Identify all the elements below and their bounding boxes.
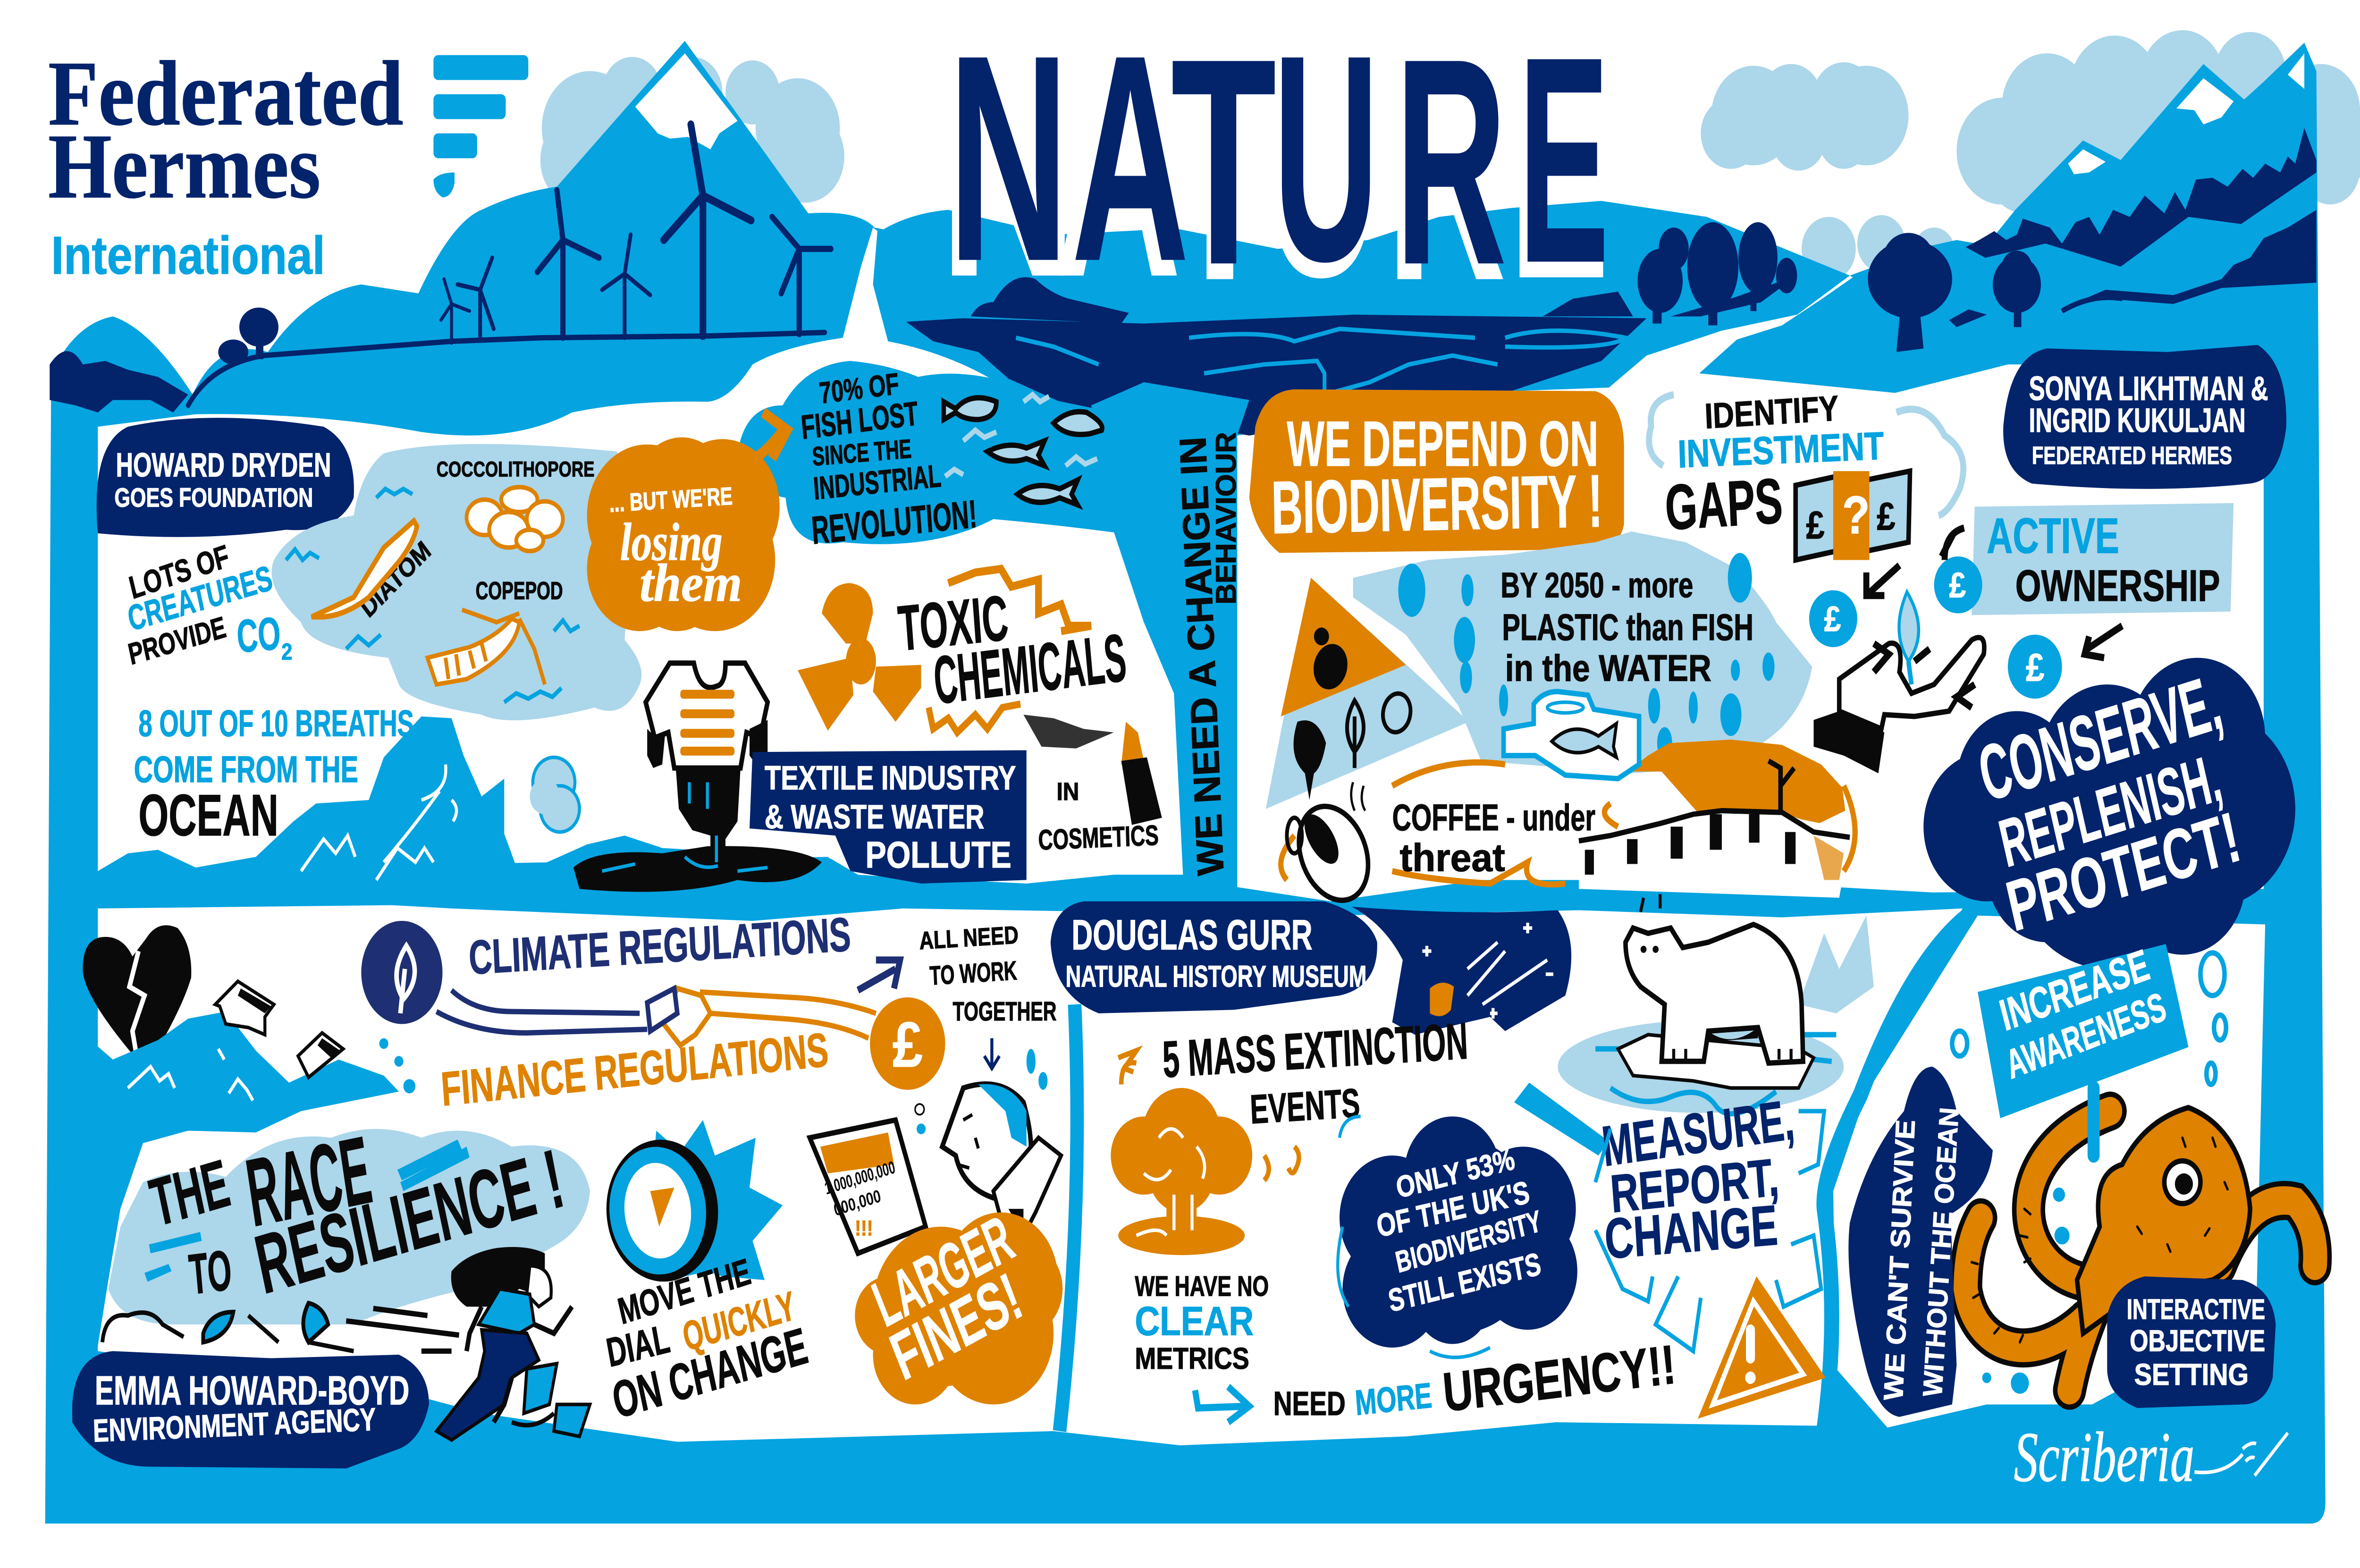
- sign: increase awareness: INCREASE: [1995, 940, 2154, 1040]
- speaker: interactive objective setting: SETTING: [2134, 1357, 2249, 1391]
- text: fish statistic: 70% OF: [818, 366, 900, 410]
- icon: bill and worried man: [810, 1049, 1061, 1253]
- text: measure report change: MEASURE,: [1599, 1087, 1797, 1178]
- text: 8 out of 10 breaths: 8 OUT OF 10 BREATHS: [138, 702, 414, 744]
- icon: fish: [944, 398, 1102, 505]
- background clouds: [540, 30, 2360, 281]
- plankton cloud: [271, 444, 641, 720]
- speaker: Sonya Likhtman and Ingrid Kukuljan: [2003, 345, 2286, 489]
- text: we need a change in behaviour: BEHAVIOUR: [1210, 432, 1242, 605]
- text: move the dial: ON CHANGE: [607, 1317, 812, 1430]
- tree on left hill: [218, 308, 278, 364]
- title NATURE: N: [939, 11, 1078, 338]
- title NATURE: N: [948, 0, 1069, 322]
- text: mass extinction: 5 MASS EXTINCTION: [1162, 1012, 1469, 1088]
- callout: race to resilience: RACE: [240, 1115, 378, 1247]
- text: lots of creatures: 2: [281, 639, 292, 665]
- callout: conserve replenish protect: PROTECT!: [2000, 797, 2247, 946]
- icon: pound coin orange: £: [893, 1009, 923, 1080]
- text: 8 out of 10 breaths: [134, 702, 414, 848]
- orange callout: but we're losing them: losing: [620, 513, 723, 572]
- title NATURE: U: [1273, 0, 1379, 322]
- callout: only 53 percent: OF THE UK'S: [1374, 1174, 1532, 1244]
- icon: ruler: [1514, 1083, 1609, 1155]
- title NATURE: T: [1163, 14, 1276, 342]
- text: clear metrics: METRICS: [1135, 1341, 1249, 1375]
- dark forest ridges: [50, 128, 2317, 413]
- trees on right hill: [1868, 233, 2122, 352]
- logo: International: [51, 226, 325, 286]
- text: toxic chemicals: TOXIC: [896, 582, 1011, 665]
- text: lots of creatures: LOTS OF: [126, 539, 233, 606]
- title NATURE: A: [1071, 0, 1189, 322]
- icon: octopus: [1952, 953, 2315, 1394]
- text: fish statistic: FISH LOST: [800, 395, 919, 447]
- icon: lipstick and smudge: COSMETICS: [1038, 819, 1159, 856]
- sign: increase awareness: AWARENESS: [2001, 984, 2171, 1088]
- callout: race to resilience: THE: [144, 1146, 236, 1241]
- text: toxic chemicals: [896, 569, 1129, 733]
- title NATURE: U: [1266, 11, 1379, 338]
- text: fish statistic: [800, 366, 978, 553]
- text: climate regulations: CLIMATE REGULATIONS: [468, 907, 852, 985]
- box: active ownership: [1972, 503, 2234, 615]
- text: move the dial: QUICKLY: [679, 1283, 799, 1360]
- text: move the dial: [603, 1250, 812, 1430]
- orange callout: but we're losing them: ... BUT WE'RE: [608, 482, 733, 518]
- speaker: Howard Dryden: HOWARD DRYDEN: [116, 447, 331, 484]
- icon: meteor space blob: [1352, 907, 1571, 1035]
- cloud: plastic than fish: PLASTIC than FISH: [1502, 607, 1753, 648]
- text: measure report change: REPORT,: [1609, 1147, 1781, 1224]
- icon: broken heart: [83, 925, 191, 1074]
- text: measure report change: CHANGE: [1603, 1193, 1779, 1271]
- icon: lipstick and smudge: [1023, 715, 1162, 856]
- callout: race to resilience: RESILIENCE !: [248, 1131, 571, 1312]
- white panel E: [1833, 916, 2265, 1427]
- icon: mushroom cloud: [1111, 1051, 1299, 1255]
- icon: dial: [597, 1120, 783, 1292]
- callout: race to resilience: [109, 1115, 590, 1324]
- box: textile industry: POLLUTE: [866, 834, 1011, 876]
- title NATURE: R: [1386, 14, 1507, 342]
- callout: only 53 percent: STILL EXISTS: [1386, 1246, 1543, 1319]
- speaker: Douglas Gurr: NATURAL HISTORY MUSEUM: [1066, 959, 1366, 993]
- text: need more urgency: NEED: [1273, 1385, 1346, 1423]
- orange callout: but we're losing them: [587, 438, 780, 631]
- speaker: Emma Howard-Boyd: EMMA HOWARD-BOYD: [95, 1368, 409, 1414]
- logo: [48, 42, 528, 286]
- text: lots of creatures: CO: [236, 607, 282, 663]
- text: finance regulations: FINANCE REGULATIONS: [439, 1023, 830, 1116]
- text: 8 out of 10 breaths: OCEAN: [138, 783, 278, 848]
- icon: hand with leaf and pounds: £: [1949, 565, 1966, 605]
- text: measure report change: [1595, 1087, 1824, 1351]
- icon: hand with leaf and pounds: £: [1824, 599, 1841, 639]
- text: all need to work together: [919, 921, 1057, 1069]
- callout: we can't survive without the ocean: WITHOUT THE OCEAN: [1917, 1106, 1965, 1398]
- icon: climate leaf coin: [361, 921, 443, 1024]
- callout: only 53 percent: ONLY 53%: [1393, 1142, 1517, 1205]
- title NATURE: E: [1518, 0, 1609, 324]
- icon: hand with leaf and pounds: [1809, 528, 2122, 773]
- infographic triangle: pyramid of life: [1266, 578, 1469, 809]
- text and icon: investment gaps: INVESTMENT: [1677, 424, 1885, 476]
- wave with ocean breath: [98, 717, 1054, 909]
- text: fish statistic: SINCE THE: [811, 434, 912, 472]
- cloud: plastic than fish: [1353, 531, 1812, 773]
- flood and houses: [90, 981, 415, 1346]
- box: textile industry: TEXTILE INDUSTRY: [765, 759, 1016, 797]
- text: clear metrics: CLEAR: [1135, 1298, 1254, 1344]
- sign: increase awareness: [1978, 940, 2188, 1118]
- blue strip: we need a change: [1091, 382, 1249, 887]
- text: fish statistic: REVOLUTION!: [810, 492, 978, 553]
- text: clear metrics: [1135, 1270, 1269, 1375]
- speaker: Emma Howard-Boyd: ENVIRONMENT AGENCY: [93, 1401, 376, 1449]
- lake: [906, 277, 1647, 436]
- text: toxic chemicals: CHEMICALS: [931, 620, 1129, 719]
- callout: conserve replenish protect: CONSERVE,: [1971, 658, 2229, 818]
- icon: copepod: [428, 610, 545, 684]
- text and icon: investment gaps: IDENTIFY: [1704, 388, 1839, 436]
- signature: Scriberia: Scriberia: [2014, 1418, 2194, 1497]
- white river, panel A: [98, 228, 1186, 884]
- coffee under threat: threat: [1400, 836, 1505, 880]
- callout: conserve replenish protect: REPLENISH,: [1993, 740, 2228, 882]
- plankton cloud: COPEPOD: [476, 577, 563, 605]
- text and icon: investment gaps: ?: [1842, 485, 1870, 545]
- speaker: Sonya Likhtman and Ingrid Kukuljan: FEDERATED HERMES: [2032, 442, 2232, 470]
- arrow: to urgency: [1195, 1387, 1249, 1422]
- trees by lake: [1637, 222, 1797, 325]
- text: move the dial: DIAL: [603, 1315, 673, 1376]
- callout: we can't survive without the ocean: WE CAN'T SURVIVE: [1879, 1119, 1921, 1401]
- text: lots of creatures: [124, 539, 292, 671]
- title NATURE: T: [1171, 0, 1276, 326]
- callout: larger fines: LARGER: [864, 1202, 1022, 1341]
- text and icon: investment gaps: [1649, 388, 1964, 560]
- plankton cloud: DIATOM: [356, 536, 436, 623]
- callout: we depend on biodiversity: [1249, 389, 1624, 553]
- text: lots of creatures: CREATURES: [124, 558, 276, 639]
- text: all need to work together: TO WORK: [929, 956, 1018, 991]
- text: all need to work together: ALL NEED: [919, 921, 1019, 955]
- icon: bill and worried man: !!!: [855, 1216, 873, 1240]
- callout: race to resilience: TO: [186, 1238, 234, 1307]
- white panel C and D: [98, 896, 1963, 1445]
- speaker: Howard Dryden: [97, 418, 354, 537]
- speaker: Douglas Gurr: DOUGLAS GURR: [1071, 910, 1313, 959]
- box: active ownership: ACTIVE: [1987, 508, 2119, 564]
- text: need more urgency: MORE: [1354, 1375, 1433, 1423]
- speaker: interactive objective setting: INTERACTIVE: [2127, 1293, 2265, 1325]
- icon: fish in bottle: [1504, 691, 1639, 779]
- icon: pound coin orange: [870, 997, 945, 1090]
- text and icon: investment gaps: £: [1877, 495, 1895, 539]
- orange callout: but we're losing them: them: [640, 554, 742, 613]
- icon: striped t-shirt and oil: [573, 663, 822, 892]
- text: mass extinction: EVENTS: [1249, 1080, 1361, 1133]
- icon: handshake arms: [437, 960, 900, 1045]
- title NATURE: R: [1395, 0, 1507, 326]
- cloud: plastic than fish: BY 2050 - more: [1500, 565, 1693, 605]
- coffee under threat: [1281, 740, 1855, 915]
- panel: fish blob: [734, 361, 1121, 553]
- text and icon: investment gaps: £: [1806, 504, 1825, 548]
- callout: only 53 percent: [1338, 1092, 1577, 1357]
- icon: coccolithophore: [467, 487, 563, 551]
- text: lots of creatures: PROVIDE: [125, 610, 229, 671]
- icon: running woman: [346, 1247, 590, 1440]
- icon: lipstick and smudge: IN: [1057, 778, 1079, 806]
- text: move the dial: MOVE THE: [614, 1250, 754, 1332]
- icon: radiation symbol: [798, 583, 921, 731]
- speaker: Sonya Likhtman and Ingrid Kukuljan: INGRID KUKULJAN: [2029, 402, 2246, 439]
- callout: larger fines: FINES!: [881, 1259, 1031, 1395]
- callout: conserve replenish protect: [1923, 658, 2295, 969]
- icon: puff cloud: [530, 758, 580, 832]
- text and icon: investment gaps: GAPS: [1664, 464, 1784, 544]
- speaker: Douglas Gurr: [1051, 902, 1377, 1013]
- icon: diatom: [312, 521, 417, 617]
- logo: Hermes: [48, 115, 320, 218]
- speaker: Emma Howard-Boyd: [72, 1351, 429, 1468]
- cloud: plastic than fish: in the WATER: [1505, 647, 1711, 689]
- text: need more urgency: [1273, 1333, 1678, 1423]
- box: textile industry: & WASTE WATER: [765, 798, 984, 836]
- title NATURE: [939, 0, 1609, 342]
- callout: we depend on biodiversity: WE DEPEND ON: [1287, 408, 1598, 480]
- coffee under threat: COFFEE - under: [1392, 797, 1595, 838]
- speaker: Sonya Likhtman and Ingrid Kukuljan: SONYA LIKHTMAN &: [2029, 370, 2268, 408]
- mountain snow caps: [635, 53, 2304, 174]
- box: active ownership: OWNERSHIP: [2015, 561, 2220, 611]
- text: all need to work together: TOGETHER: [952, 997, 1057, 1027]
- title NATURE: E: [1509, 12, 1609, 340]
- icon: hand with leaf and pounds: £: [2026, 646, 2044, 690]
- icon: coffee cup: [1285, 792, 1382, 915]
- speaker: interactive objective setting: [2107, 1276, 2276, 1408]
- logo: Federated: [48, 42, 404, 145]
- blue divider panel C to D: [1060, 1004, 1077, 1431]
- text: clear metrics: WE HAVE NO: [1135, 1270, 1269, 1302]
- box: textile industry: [750, 750, 1027, 884]
- text: need more urgency: URGENCY!!: [1441, 1333, 1678, 1423]
- blue divider panel D to E: [1824, 916, 1969, 1427]
- icon: warning triangle: [1698, 1276, 1826, 1419]
- title NATURE: A: [1054, 11, 1181, 338]
- speaker: Howard Dryden: GOES FOUNDATION: [114, 483, 313, 513]
- text: 8 out of 10 breaths: COME FROM THE: [134, 749, 358, 791]
- callout: we can't survive without the ocean: [1848, 1067, 1993, 1417]
- text: we need a change in behaviour: WE NEED A CHANGE IN: [1172, 436, 1232, 877]
- callout: we depend on biodiversity: BIODIVERSITY !: [1271, 459, 1603, 549]
- speaker: interactive objective setting: OBJECTIVE: [2130, 1324, 2265, 1358]
- icon: bill and worried man: 000,000: [832, 1186, 883, 1220]
- plankton cloud: COCCOLITHOPORE: [437, 457, 595, 481]
- callout: only 53 percent: BIODIVERSITY: [1392, 1204, 1544, 1279]
- text: mass extinction: [1162, 1012, 1469, 1133]
- text: fish statistic: INDUSTRIAL: [812, 458, 942, 506]
- icon: leaves and shrub: [102, 1303, 354, 1351]
- icon: bill and worried man: 1,000,000,000: [823, 1157, 897, 1198]
- callout: larger fines: [855, 1202, 1062, 1404]
- white road, panel B: [1237, 276, 2264, 902]
- wind turbines: [188, 125, 831, 405]
- icon: iceberg and polar bear: [1558, 894, 1874, 1114]
